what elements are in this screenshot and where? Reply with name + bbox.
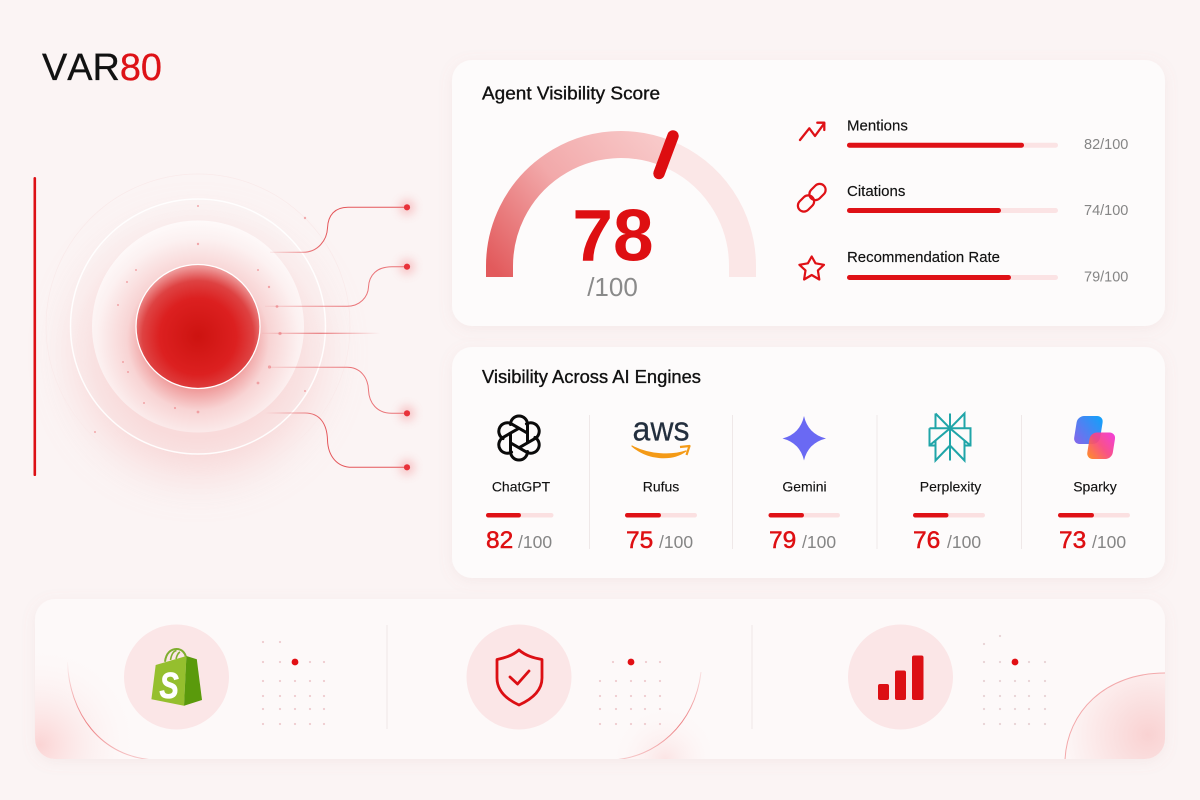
connector 3 [262,332,380,334]
gauge value: 78 [572,196,654,276]
metric: recommendation rate: 79/100 [1084,270,1128,286]
engine: Perplexity: Perplexity [920,478,981,494]
dot grid [263,642,324,724]
panel: bottom platform strip [35,624,1165,759]
connector 4 [270,367,407,413]
engine: ChatGPT: ChatGPT [492,478,551,494]
metric: citations [795,181,1128,219]
panel: agent visibility score [452,60,1165,326]
metric: recommendation rate: Recommendation Rate [847,249,1000,266]
icon: link [795,181,828,214]
metric: mentions: Mentions [847,118,908,135]
engine: Rufus: Rufus [643,478,679,494]
scattered particles [94,205,306,433]
engine: ChatGPT: /100 [518,532,552,552]
red dot [628,659,634,665]
heading: Agent Visibility Score [482,84,660,104]
accent vertical line [34,177,36,476]
engine: ChatGPT [486,416,554,554]
icon: star [799,256,824,280]
icon: Sparky overlapping tiles [1073,416,1116,459]
red dot [292,659,298,665]
icon: Shopify bag: S [160,665,179,706]
engine: Sparky [1058,416,1130,554]
icon: ChatGPT knot [496,416,542,460]
orb glow [80,234,316,470]
engine: Rufus: /100 [659,532,693,552]
engine: Sparky: 73 [1059,527,1086,554]
outer white ring [70,199,326,454]
engine: Sparky: Sparky [1073,478,1117,494]
panel: visibility across AI engines [452,347,1165,578]
metric: mentions [800,118,1128,153]
engine: Gemini: /100 [802,532,836,552]
white disc [92,220,304,432]
heading: Visibility Across AI Engines [482,367,701,387]
engine: Perplexity: 76 [913,527,940,554]
engine: Rufus [625,410,697,554]
icon: aws: aws [632,410,690,448]
icon: bar chart [878,656,924,700]
metric: mentions: 82/100 [1084,137,1128,153]
feature: Shopify [124,624,324,730]
engine: Perplexity [913,414,985,554]
icon: trend arrow [800,123,824,140]
gauge needle [659,136,673,174]
engine: Perplexity: /100 [947,532,981,552]
feature: trust shield [466,624,660,730]
gauge [500,136,742,302]
icon: four-point star [782,416,826,460]
icon: Shopify bag [151,649,202,706]
dot grid [984,636,1045,724]
engine: Rufus: 75 [626,527,653,554]
engine: Gemini: 79 [769,527,796,554]
feature: performance bars [848,624,1045,730]
metric: citations: 74/100 [1084,203,1128,219]
card background [35,599,1165,759]
gauge track [666,153,742,277]
hero: glowing red orb with connectors [46,174,414,478]
card background [452,347,1165,578]
icon: shield check [497,650,542,705]
connector 2 [265,267,407,306]
card background [452,60,1165,326]
dividers [387,625,752,729]
engine: ChatGPT: 82 [486,527,513,554]
connector 1 [270,207,407,252]
gauge value arc [500,145,666,277]
column dividers [590,415,1022,549]
icon circle [466,624,572,730]
red core [136,264,260,388]
metric: citations: Citations [847,183,905,200]
engine: Gemini [768,416,840,554]
connector end dots [400,200,414,474]
engine: Gemini: Gemini [782,478,827,494]
icon: Perplexity mark [930,414,970,460]
engine: Sparky: /100 [1092,532,1126,552]
dot grid [600,662,660,724]
icon circle [848,624,953,730]
faint outer rings [46,174,350,478]
logo: VAR80: VAR80 [42,47,162,89]
gauge scale: /100 [587,272,638,302]
icon circle [124,624,229,730]
connector 5 [263,413,407,467]
red dot [1012,659,1018,665]
decorative corners [35,664,1165,759]
metric: recommendation rate [799,249,1128,286]
